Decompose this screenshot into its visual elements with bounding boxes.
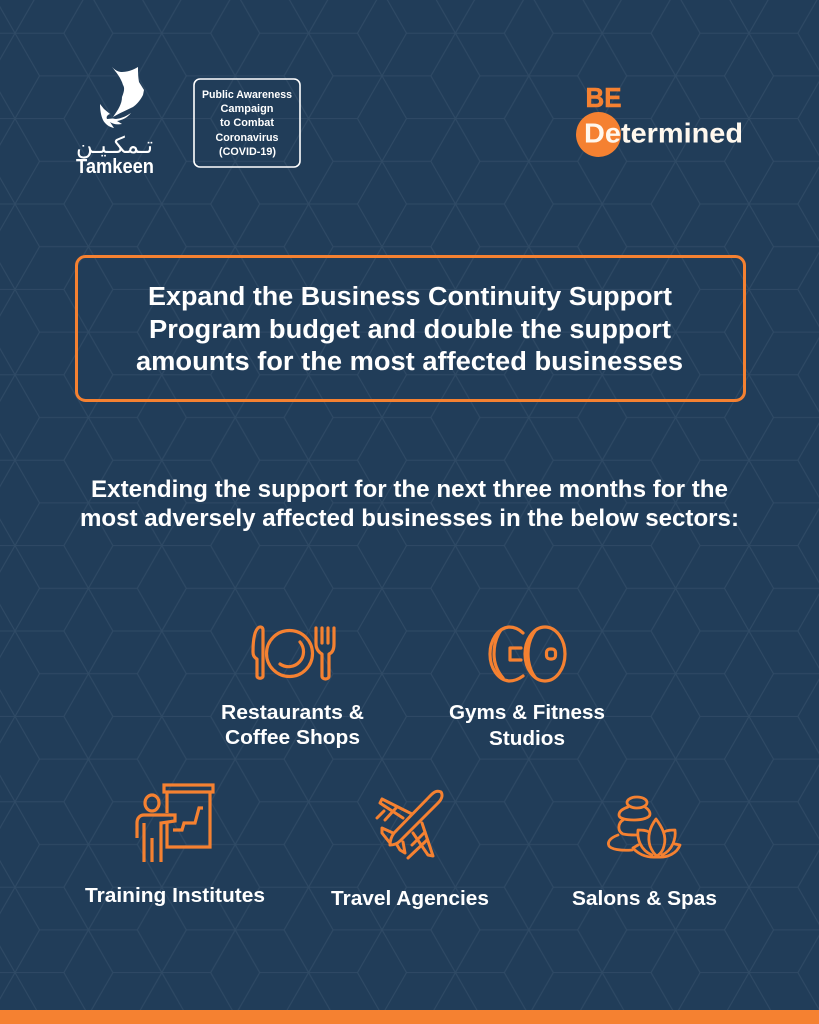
sector: travel agencies <box>331 791 489 910</box>
icon: weight plates <box>490 627 565 681</box>
icon: Tamkeen bird emblem <box>100 67 144 128</box>
footer bar <box>0 1010 819 1024</box>
sector: salons and spas <box>572 797 717 910</box>
sector: restaurants and coffee shops <box>221 627 364 749</box>
subheading <box>80 476 739 532</box>
callout: main headline: amounts for the most affected businesses <box>136 348 683 376</box>
Arabic wordmark: تـمكـيـن <box>76 133 153 159</box>
sector: gyms and fitness studios: Studios <box>489 728 565 750</box>
icon: knife, plate and fork <box>253 627 334 679</box>
label: Training Institutes <box>85 885 265 907</box>
subheading: Extending the support for the next three months for the <box>91 476 728 503</box>
campaign badge: Coronavirus <box>216 132 278 144</box>
label: Salons & Spas <box>572 888 717 910</box>
icon: airplane <box>377 791 442 858</box>
Tamkeen wordmark: Tamkeen <box>76 156 154 178</box>
campaign badge <box>194 79 300 167</box>
sector: restaurants and coffee shops: Coffee Shops <box>225 727 360 749</box>
campaign badge: Public Awareness <box>202 89 292 101</box>
campaign badge: to Combat <box>220 117 274 129</box>
Be Determined logo <box>576 82 743 157</box>
callout: main headline: Program budget and double the support <box>149 316 672 344</box>
icon: presenter with chart board <box>137 785 213 862</box>
label: Restaurants & <box>221 702 364 724</box>
Tamkeen logo <box>76 67 154 178</box>
subheading: most adversely affected businesses in the below sectors: <box>80 505 739 532</box>
campaign badge: (COVID-19) <box>219 146 276 158</box>
campaign badge: Campaign <box>220 103 274 115</box>
Be Determined logo: BE <box>586 82 622 113</box>
sector: gyms and fitness studios <box>449 627 605 750</box>
icon: stones and lotus <box>608 797 680 857</box>
callout: main headline <box>76 256 744 400</box>
label: Gyms & Fitness <box>449 702 605 724</box>
label: Travel Agencies <box>331 888 489 910</box>
sector: training institutes <box>85 785 265 907</box>
Be Determined logo: Determined <box>584 118 743 148</box>
callout: main headline: Expand the Business Continuity Support <box>148 283 673 311</box>
